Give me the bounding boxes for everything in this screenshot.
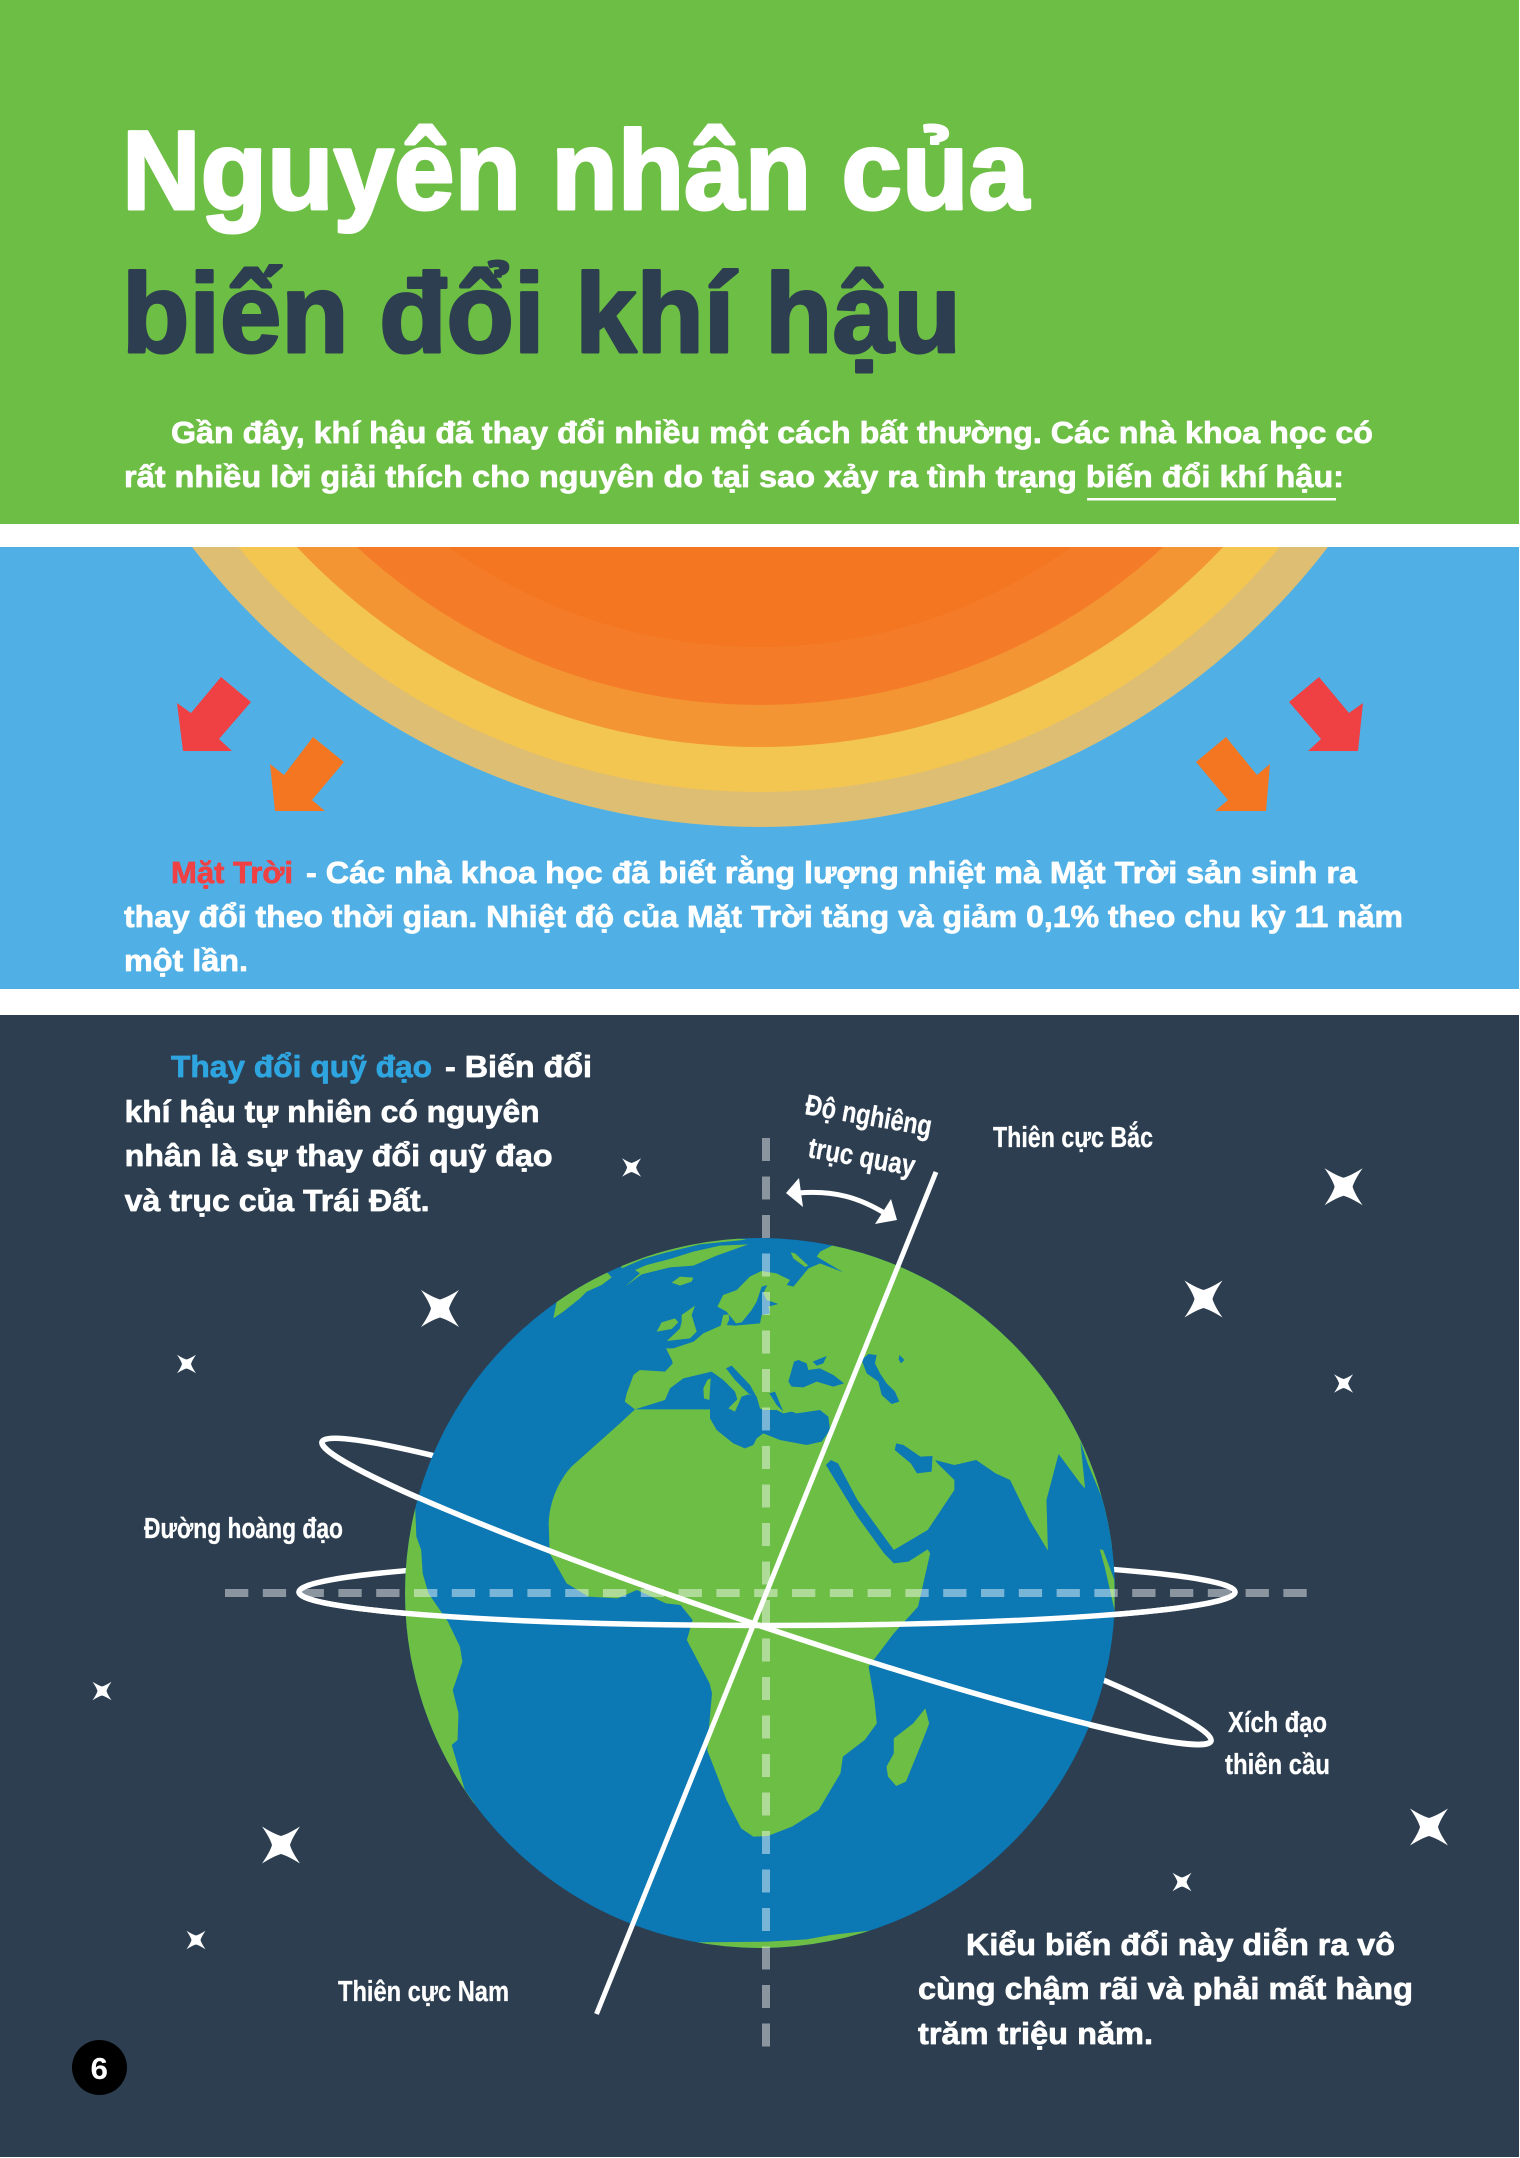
label: axial tilt: Độ nghiêng (803, 1089, 934, 1143)
vertical dashed axis (762, 1138, 770, 2048)
closing text: cùng chậm rãi và phải mất hàng (918, 1971, 1413, 2006)
rings behind globe (299, 1409, 1235, 1774)
intro text: Gần đây, khí hậu đã thay đổi nhiều một cách bất thường. Các nhà khoa học có (171, 415, 1373, 450)
sun text: thay đổi theo thời gian. Nhiệt độ của Mặt Trời tăng và giảm 0,1% theo chu kỳ 11 năm (124, 899, 1403, 934)
land: Britain (667, 1306, 697, 1341)
sea: Azov (813, 1356, 827, 1366)
land: Sumatra (1100, 1549, 1115, 1612)
label: celestial equator (1225, 1707, 1330, 1781)
sea: Baltic (727, 1285, 778, 1326)
label: north celestial pole: Thiên cực Bắc (993, 1120, 1153, 1154)
label: ecliptic: Đường hoàng đạo (144, 1513, 343, 1545)
globe (405, 1238, 1115, 1948)
land: Greenland (625, 1244, 748, 1287)
land: South America (405, 1508, 474, 1804)
land: Antarctica (696, 1930, 870, 1948)
sun text: Mặt Trời (171, 855, 293, 890)
closing text: Kiểu biến đổi này diễn ra vô (966, 1927, 1395, 1962)
stars (92, 1158, 1448, 1949)
orbit text: - Biến đổi (445, 1049, 592, 1084)
label: axial tilt (803, 1089, 934, 1183)
arrow: orange left (270, 737, 344, 811)
label: south celestial pole: Thiên cực Nam (338, 1976, 509, 2008)
sea: Adriatic (726, 1366, 757, 1398)
land: Aral sea (899, 1355, 904, 1363)
title (122, 108, 1030, 376)
land: Eurasia and Africa (549, 1233, 1156, 1837)
sea: Persian Gulf (895, 1443, 933, 1473)
title: biến đổi khí hậu (122, 251, 961, 376)
sun text: - Các nhà khoa học đã biết rằng lượng nhiệt mà Mặt Trời sản sinh ra (306, 854, 1358, 890)
panel: orbit (0, 1015, 1519, 2157)
orbit text: và trục của Trái Đất. (125, 1183, 430, 1218)
land: Iceland (672, 1277, 693, 1286)
orbit text: nhân là sự thay đổi quỹ đạo (125, 1138, 553, 1173)
orbit text: khí hậu tự nhiên có nguyên (125, 1094, 540, 1129)
sea: Caspian (862, 1354, 899, 1404)
land: Ireland (657, 1318, 678, 1332)
sun text: một lần. (124, 943, 248, 978)
sun layers (192, 547, 1328, 827)
land: Arctic bar (791, 1252, 808, 1267)
land: Canada (553, 1268, 612, 1318)
land: Madagascar (887, 1708, 929, 1786)
sea: Mediterranean (635, 1372, 830, 1448)
label: axial tilt: trục quay (806, 1132, 918, 1183)
title: Nguyên nhân của (122, 108, 1030, 233)
arrow: tilt angle (786, 1178, 897, 1224)
sea: edge sliver (1080, 1442, 1113, 1553)
panel: green header (0, 0, 1519, 524)
orbit text (125, 1049, 592, 1218)
label: celestial equator: Xích đạo (1228, 1707, 1327, 1739)
tilted rotation axis (596, 1172, 936, 2014)
sea: Black Sea (788, 1360, 844, 1387)
land: Arctic islands (622, 1238, 746, 1268)
label: celestial equator: thiên cầu (1225, 1749, 1330, 1781)
arrow: red left (177, 677, 251, 751)
panel: sun (0, 547, 1519, 989)
intro text (124, 415, 1373, 500)
ring front arcs (299, 1442, 1235, 1744)
arrow: red right (1289, 677, 1363, 751)
horizontal dashed line (225, 1589, 1308, 1597)
page number (72, 2040, 127, 2095)
closing text: trăm triệu năm. (918, 2016, 1153, 2051)
page number: 6 (90, 2051, 108, 2086)
sea: Aegean (769, 1392, 783, 1412)
intro text: rất nhiều lời giải thích cho nguyên do tại sao xảy ra tình trạng biến đổi khí hậu: (124, 459, 1344, 494)
sun text (124, 854, 1403, 978)
land: Sardinia (703, 1378, 711, 1400)
arrow: orange right (1196, 737, 1270, 811)
orbit text: Thay đổi quỹ đạo (171, 1049, 432, 1084)
closing text (918, 1927, 1413, 2051)
